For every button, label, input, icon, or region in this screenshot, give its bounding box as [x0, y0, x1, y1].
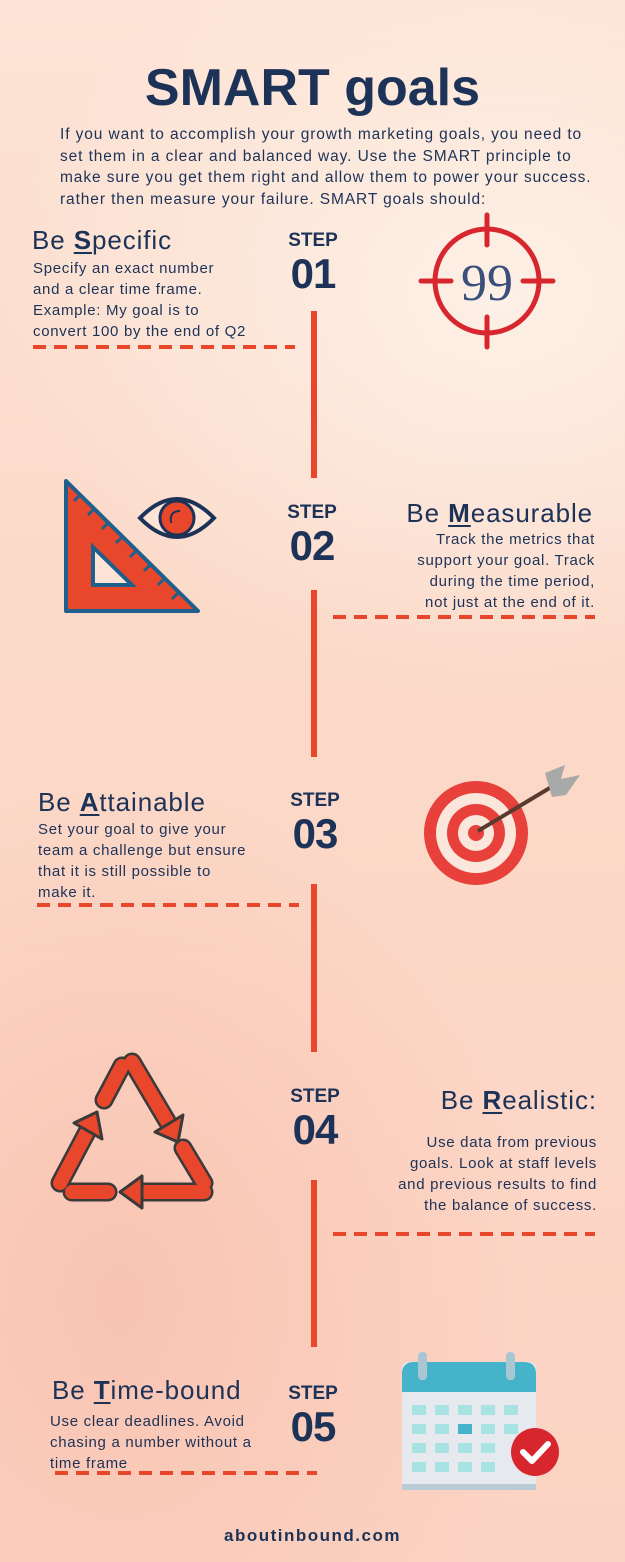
step 4 body: and previous results to find: [398, 1176, 597, 1193]
step 2 body: not just at the end of it.: [425, 594, 595, 611]
step 4 label: STEP: [290, 1086, 340, 1107]
step 1 heading: Be Specific: [32, 225, 172, 255]
step 5 body: time frame: [50, 1455, 128, 1472]
step 1 label: 01: [291, 250, 335, 297]
step 1 label: STEP: [288, 230, 338, 251]
step 5 heading: Be Time-bound: [52, 1375, 241, 1405]
step 5 body: chasing a number without a: [50, 1434, 252, 1451]
step 1 label: [288, 230, 338, 297]
step 5 label: 05: [291, 1403, 335, 1450]
intro text: [60, 126, 592, 208]
step 2 label: [287, 502, 337, 569]
step 4 heading: Be Realistic:: [441, 1085, 597, 1115]
step 3 body: Set your goal to give your: [38, 821, 226, 838]
step 3 label: 03: [293, 810, 337, 857]
icon: calendar with check: [402, 1352, 559, 1490]
icon: set square and eye: [64, 479, 217, 613]
step 3 body: make it.: [38, 884, 96, 901]
step 1 body: Example: My goal is to: [33, 302, 199, 319]
step 2 body: during the time period,: [430, 573, 595, 590]
step 3 body: that it is still possible to: [38, 863, 211, 880]
step 3 heading: Be Attainable: [38, 787, 206, 817]
step 1 body: [33, 260, 246, 340]
step 4 body: Use data from previous: [427, 1134, 597, 1151]
step 1 body: and a clear time frame.: [33, 281, 202, 298]
step 4 body: the balance of success.: [424, 1197, 597, 1214]
step 1 body: convert 100 by the end of Q2: [33, 323, 246, 340]
step 4 body: goals. Look at staff levels: [410, 1155, 597, 1172]
step 5 body: Use clear deadlines. Avoid: [50, 1413, 245, 1430]
icon: target with arrow: [424, 765, 580, 885]
intro text: rather then measure your failure. SMART goals should:: [60, 190, 486, 208]
step 1 body: Specify an exact number: [33, 260, 214, 277]
step 3 body: team a challenge but ensure: [38, 842, 246, 859]
intro text: set them in a clear and balanced way. Use the SMART principle to: [60, 148, 572, 164]
step 5 body: [50, 1413, 252, 1472]
icon: crosshair 99: [418, 212, 556, 350]
intro text: If you want to accomplish your growth marketing goals, you need to: [60, 126, 582, 143]
step 2 body: Track the metrics that: [436, 531, 595, 548]
title: SMART goals: [145, 59, 480, 117]
step 2 label: STEP: [287, 502, 337, 523]
step 2 label: 02: [290, 522, 334, 569]
step 5 label: STEP: [288, 1383, 338, 1404]
step 2 heading: Be Measurable: [406, 498, 593, 528]
step 4 label: 04: [293, 1106, 337, 1153]
step 2 body: [417, 531, 595, 611]
step 2 body: support your goal. Track: [417, 552, 595, 569]
footer: aboutinbound.com: [224, 1526, 401, 1545]
icon: crosshair 99: 99: [461, 255, 513, 312]
intro text: make sure you get them right and allow them to power your success.: [60, 169, 592, 186]
step 4 body: [398, 1134, 597, 1214]
step 3 label: STEP: [290, 790, 340, 811]
step 4 label: [290, 1086, 340, 1153]
step 5 label: [288, 1383, 338, 1450]
icon: recycle arrows: [50, 1052, 214, 1210]
step 3 body: [38, 821, 246, 901]
step 3 label: [290, 790, 340, 857]
